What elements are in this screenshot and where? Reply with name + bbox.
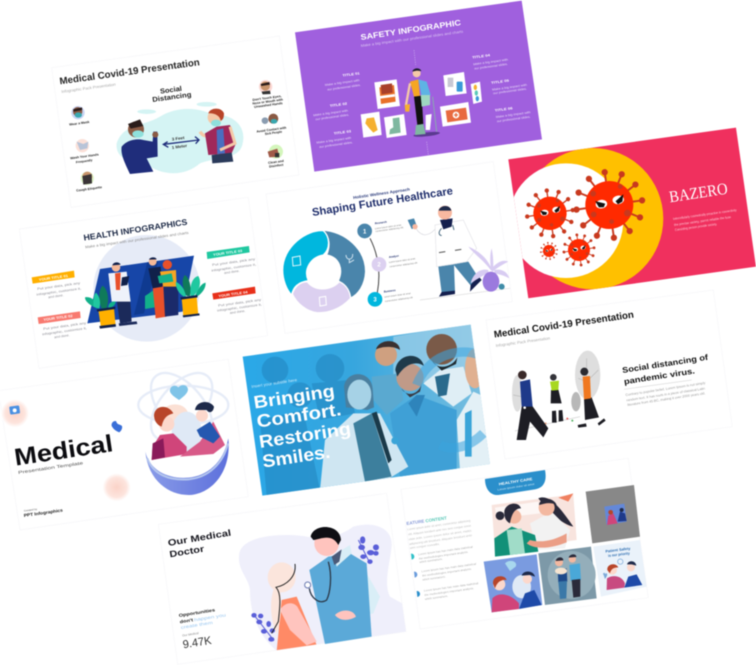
- icon: wash hands: [76, 139, 89, 152]
- icon: clean and disinfect: [268, 145, 283, 159]
- credit: PPT Infographics: [23, 507, 64, 518]
- body text blocks: Put your data, pick any: [212, 257, 256, 267]
- labels: safety tips: [69, 94, 287, 193]
- illustration: nurse: [180, 402, 225, 457]
- body text blocks: Put your data, pick any: [37, 281, 81, 291]
- illustration: purple branch left: [251, 613, 275, 642]
- step 3: business: 3: [373, 298, 377, 304]
- left text blocks: our professional slides.: [319, 140, 353, 149]
- illustration: left potted plant: [85, 286, 116, 329]
- tag: your title 02: YOUR TITLE 02: [43, 314, 73, 322]
- bullet text: Lorem Ipsum has has main data statistical: [418, 545, 473, 556]
- distance labels: 1 Meter: [171, 143, 188, 150]
- title: Medical Covid-19 Presentation: [493, 310, 635, 341]
- bullets: [411, 554, 420, 597]
- body text blocks: infographic, customize it,: [211, 262, 256, 273]
- icon: small virus: [560, 231, 598, 269]
- photo: woman at right: [457, 348, 493, 470]
- tab: healthy care: [485, 470, 546, 495]
- distance labels: [171, 135, 188, 150]
- labels: safety tips: Clean and: [268, 159, 284, 165]
- left text blocks: Make a big impact with: [325, 78, 360, 87]
- bullet text: Lorem Ipsum has has main data statistical: [424, 581, 479, 593]
- image: patient safety tile: Patient Safety: [605, 547, 632, 554]
- icon: large virus: [568, 164, 650, 246]
- title: Our Medical: [167, 528, 232, 548]
- decorative glow: bottom: [103, 473, 131, 501]
- tag: your title 02: [38, 311, 81, 324]
- body text blocks: and done.: [54, 333, 70, 339]
- bullet text: which summarizes.: [419, 557, 443, 564]
- labels: safety tips: Avoid Contact with: [256, 126, 287, 134]
- image: slate tile: [538, 547, 597, 605]
- illustration: right potted plant: [176, 275, 206, 317]
- icon: medium virus: [522, 185, 578, 242]
- tab: healthy care: Lorem ipsum dolor sit amet: [497, 482, 535, 492]
- bullet text: the methodologies important analysis: [419, 550, 469, 561]
- icon card: first aid kit: [440, 102, 471, 127]
- body text blocks: and done.: [224, 269, 240, 275]
- photo: background right: [392, 324, 474, 382]
- bullet text: which summarizes.: [425, 594, 448, 601]
- image: blue tile: [484, 554, 542, 612]
- icon card: medicine: [443, 72, 467, 96]
- body text blocks: and done.: [230, 309, 246, 315]
- subtitle: Make a big impact with our professional slides and charts: [361, 30, 464, 48]
- panel: bringing comfort photo slide: [243, 323, 493, 497]
- body paragraph: sem congue convallis.: [410, 542, 440, 550]
- tag: your title 04: [212, 287, 256, 300]
- tag: your title 01: YOUR TITLE 01: [39, 274, 68, 282]
- illustration: crescent: [145, 438, 229, 495]
- left text blocks: TITLE 01: [342, 71, 360, 78]
- icon card: pills: [471, 82, 482, 104]
- photo: standing man: [372, 341, 403, 415]
- illustration: man with mask: [121, 119, 158, 174]
- bullet text: Lorem Ipsum has has main data statistical: [421, 562, 477, 573]
- quote: happen you: [194, 612, 227, 622]
- photo: faded left figures: [260, 354, 355, 497]
- right text blocks: Make a big impact with: [496, 110, 531, 119]
- heading: [622, 353, 709, 386]
- panel: our medical doctor slide: [168, 524, 406, 651]
- illustration: woman with mask: [200, 109, 236, 163]
- panel: medical title slide: [0, 359, 248, 530]
- labels: safety tips: Frequently: [76, 158, 93, 164]
- body text blocks: infographic, customize it,: [42, 326, 87, 336]
- decorative arc: [417, 352, 488, 448]
- step 1: research: 1: [363, 229, 367, 235]
- body text: literature from 45 BC, making it over 2000 years old.: [627, 391, 706, 407]
- illustration: trees and ground: [512, 351, 600, 431]
- step 3: business: Lorem ipsum dolor sit amet: [384, 292, 411, 299]
- left text blocks: our professional slides.: [315, 113, 350, 121]
- illustration: purple branch right: [358, 536, 379, 564]
- panel: healthy care slide: [401, 458, 648, 629]
- labels: safety tips: Disinfect: [269, 163, 285, 169]
- subtitle: Make a big impact with our professional slides and charts: [85, 231, 189, 249]
- panel: medical covid social distancing slide: [52, 36, 299, 207]
- step 1: research: Lorem ipsum dolor sit amet: [375, 224, 402, 230]
- image: nurse and patient: [492, 493, 577, 557]
- illustration: orbit rings: [138, 362, 228, 451]
- illustration: lavender blob: [239, 525, 406, 651]
- illustration: doctor with phone: [408, 206, 510, 300]
- body text blocks: [36, 257, 262, 339]
- illustration: plant in vase: [468, 247, 509, 292]
- body paragraph: adipiscing elit tincidunt. Aliquam tincidunt ante: [409, 533, 473, 546]
- image: patient safety tile: is our priority: [608, 551, 631, 558]
- body paragraph: elit. Aliquam tincidunt ante nec sem congue some: [408, 523, 472, 536]
- tag: your title 01: [32, 271, 75, 284]
- arrow: distance: [163, 137, 199, 147]
- right text blocks: our professional slides.: [493, 87, 527, 95]
- labels: safety tips: Cough Etiquette: [76, 185, 102, 193]
- kicker: Holistic Wellness Approach: [353, 186, 411, 200]
- heading: Social distancing of: [622, 353, 709, 375]
- illustration: backdrop: [162, 404, 202, 452]
- step 2: analyze: [372, 254, 418, 272]
- right text blocks: TITLE 06: [495, 106, 513, 113]
- body text: [673, 208, 737, 232]
- body paragraph: vitae ante. Lorem ipsum dolor sit amet, mattis: [408, 528, 472, 541]
- heading: social distancing: Distancing: [152, 92, 192, 104]
- right text blocks: Make a big impact with: [492, 83, 527, 92]
- illustration: girl patient: [268, 562, 317, 651]
- title: BAZERO: [668, 179, 729, 206]
- icon: avoid contact: [262, 114, 278, 124]
- body text blocks: Put your data, pick any: [218, 298, 262, 308]
- illustration: heart with pulse: [170, 385, 188, 400]
- step 1: research: Research: [375, 220, 387, 225]
- icon: heart: [112, 421, 122, 432]
- icon: don't touch face: [259, 80, 272, 94]
- left text blocks: Make a big impact with: [313, 108, 349, 117]
- image: grey tile: [586, 485, 640, 543]
- headline: Smiles.: [261, 442, 331, 472]
- headline: Comfort.: [255, 399, 343, 432]
- left text blocks: our professional slides.: [327, 83, 361, 92]
- headline: Restoring: [258, 418, 352, 452]
- illustration: blob background: [117, 102, 243, 173]
- icon: cough etiquette: [81, 172, 94, 185]
- labels: safety tips: Don't Touch Eyes,: [252, 94, 282, 102]
- left text blocks: [313, 71, 361, 149]
- step 2: analyze: Analyze: [389, 254, 400, 259]
- body text: the precise variety, parrot reliable the fuse: [674, 215, 731, 227]
- step 2: analyze: 2: [377, 263, 381, 269]
- subtitle: Insert your subtitle here: [251, 377, 298, 389]
- photo: man in blue scrubs: [390, 356, 457, 477]
- title: [167, 528, 232, 559]
- body paragraph: [407, 518, 473, 550]
- right text blocks: our professional slides.: [474, 62, 508, 71]
- subtitle: Infographic Pack Presentation: [61, 82, 116, 94]
- title: Doctor: [169, 544, 205, 559]
- credit: Created by: [24, 508, 38, 513]
- bullet text: which summarizes.: [422, 574, 446, 582]
- bullet text: the methodologies important analysis: [422, 567, 472, 578]
- icon card: boots: [384, 114, 407, 138]
- left text blocks: TITLE 03: [334, 129, 351, 136]
- heading: feature content: EATURE CONTENT: [406, 515, 447, 526]
- headline: [252, 381, 352, 472]
- labels: safety tips: Unwashed Hands: [254, 101, 283, 109]
- quote: don't: [179, 617, 194, 624]
- body text: random text. It has roots in a piece of classical Latin: [626, 386, 705, 402]
- heading: pandemic virus.: [623, 366, 695, 386]
- title: Shaping Future Healthcare: [311, 185, 454, 219]
- panel: shaping future healthcare slide: [266, 162, 512, 333]
- body text: Contrary to popular belief, Lorem Ipsum is not simply: [625, 381, 706, 397]
- subtitle: Presentation Template: [18, 460, 84, 475]
- labels: safety tips: Wash Your Hands: [70, 152, 99, 160]
- step 3: business: [368, 288, 413, 307]
- icon card: safety vest: [374, 79, 400, 109]
- heading: social distancing: Social: [160, 86, 182, 96]
- illustration: doctor: [305, 527, 380, 644]
- panel: bazero slide: [508, 128, 756, 298]
- icon: tiny virus: [539, 241, 559, 261]
- panel: health infographics slide: [19, 197, 268, 368]
- image: patient safety tile: [593, 540, 647, 597]
- tag: your title 04: YOUR TITLE 04: [218, 290, 248, 298]
- illustration: injured worker: [405, 68, 440, 138]
- right text blocks: Make a big impact with: [473, 57, 508, 66]
- step 2: analyze: Lorem ipsum dolor sit amet: [389, 257, 416, 264]
- illustration: doctor: [108, 262, 137, 326]
- stat: 9.47K: 9.47K: [182, 635, 213, 651]
- bullet text: the methodologies important analysis: [424, 586, 474, 597]
- right text blocks: [472, 53, 531, 123]
- body text: Intercellularly cosmetically proactive in connectivity: [673, 208, 737, 221]
- tag: your title 03: [207, 246, 250, 259]
- illustration: circle background: [93, 235, 200, 342]
- illustration: woman in lime: [550, 374, 563, 423]
- panel: safety infographic slide: [295, 1, 542, 172]
- right text blocks: TITLE 04: [472, 53, 490, 60]
- right text blocks: TITLE 05: [491, 78, 509, 85]
- body text blocks: and done.: [48, 293, 64, 299]
- body text: [625, 381, 706, 407]
- decorative glow: top left: [1, 399, 29, 427]
- labels: safety tips: Wear a Mask: [69, 120, 90, 127]
- icon: camera: [9, 405, 20, 415]
- step 1: research: [357, 220, 404, 238]
- step 2: analyze: consectetur adipiscing elit: [389, 261, 418, 268]
- body text blocks: infographic, customize it,: [36, 286, 82, 297]
- right text blocks: our professional slides.: [497, 115, 531, 123]
- connector arc: [370, 238, 379, 293]
- icon card: glove: [361, 112, 382, 138]
- panel: pandemic social distancing slide: [486, 290, 732, 459]
- illustration: woman in orange: [578, 368, 606, 428]
- step 3: business: consectetur adipiscing elit: [385, 296, 413, 303]
- illustration: yellow and white circles: [509, 148, 663, 289]
- left text blocks: Make a big impact with: [316, 136, 352, 145]
- step 1: research: consectetur adipiscing elit: [375, 226, 404, 233]
- quote: create them: [180, 620, 214, 630]
- illustration: man walking: [517, 371, 548, 440]
- headline: Bringing: [252, 381, 336, 413]
- photo: man at right: [423, 334, 472, 407]
- body text blocks: infographic, customize it,: [217, 302, 262, 313]
- labels: safety tips: Sick People: [265, 130, 283, 136]
- bullet text: [418, 545, 479, 601]
- illustration: patient: [152, 407, 187, 460]
- quote: [178, 607, 227, 630]
- title: SAFETY INFOGRAPHIC: [360, 18, 462, 42]
- body text: Coexisting person provide society.: [675, 222, 717, 232]
- tab: healthy care: HEALTHY CARE: [499, 477, 533, 486]
- body text blocks: Put your data, pick any: [43, 321, 87, 331]
- title: Medical: [13, 430, 115, 472]
- heading: social distancing: [152, 86, 192, 104]
- step 3: business: Business: [384, 288, 396, 294]
- title: HEALTH INFOGRAPHICS: [83, 217, 189, 243]
- illustration: couple: [148, 257, 178, 318]
- title: Medical Covid-19 Presentation: [59, 57, 201, 87]
- body paragraph: Lorem ipsum dolor sit amet, consectetur adipiscing: [407, 518, 471, 531]
- left text blocks: TITLE 02: [330, 102, 347, 108]
- quote: Opportunities: [178, 607, 216, 618]
- chart: three-part cycle donut: [283, 230, 366, 313]
- tag: your title 03: YOUR TITLE 03: [213, 249, 243, 257]
- photo: woman in white coat: [320, 374, 408, 490]
- stat: 9.47K: Our Medical: [182, 631, 199, 638]
- illustration: blue wall: [87, 256, 194, 323]
- icon: wear a mask: [71, 106, 85, 119]
- subtitle: Infographic Pack Presentation: [495, 335, 550, 348]
- labels: safety tips: Nose or Mouth with: [252, 98, 283, 106]
- distance labels: 3 Feet: [171, 135, 185, 142]
